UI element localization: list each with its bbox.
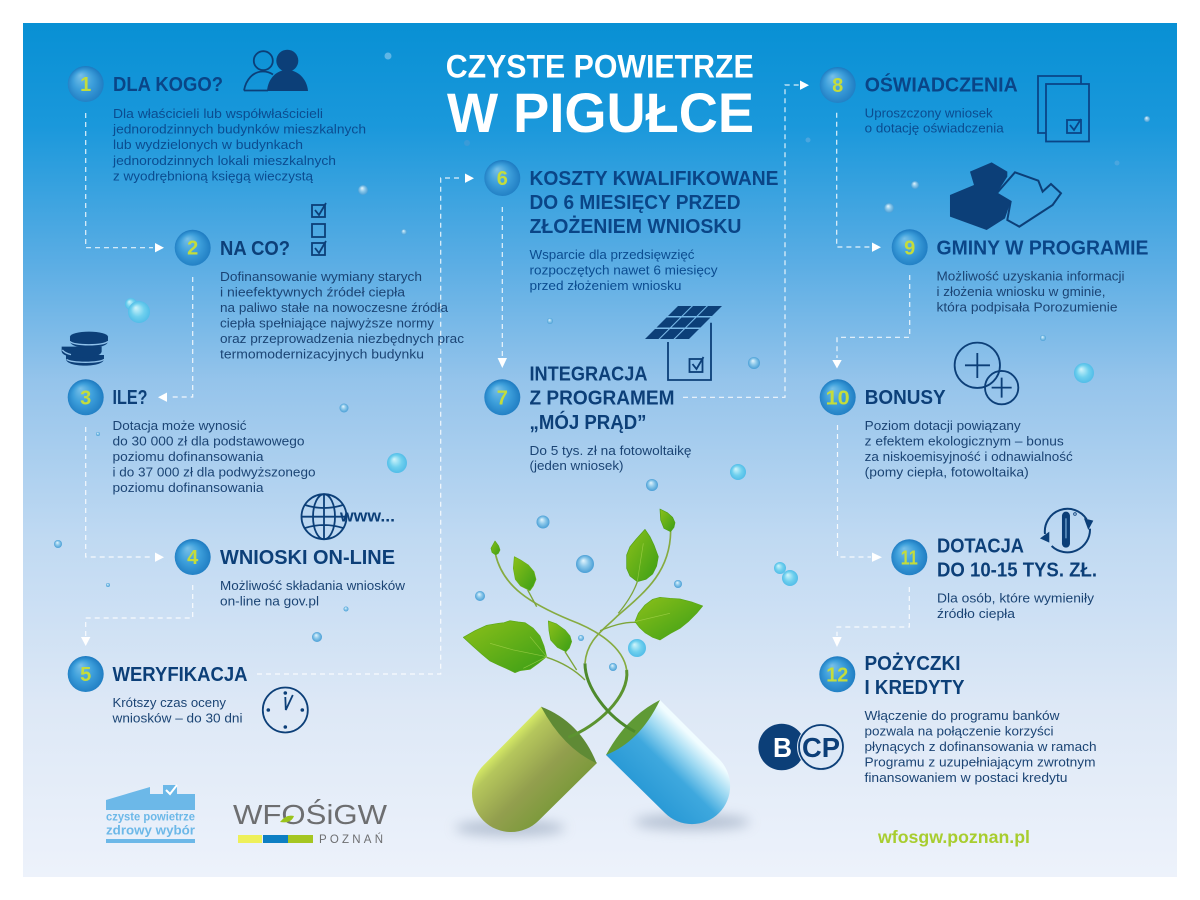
step 4: wnioski on-line: on-line na gov.pl xyxy=(220,594,319,608)
step 6: koszty kwalifikowane: DO 6 MIESIĘCY PRZED xyxy=(530,192,740,214)
step 3: ile: i do 37 000 zł dla podwyższonego xyxy=(112,466,316,480)
logo: WFOŚiGW Poznań: WFOŚiGW xyxy=(233,798,388,830)
step 9: gminy w programie xyxy=(892,229,1148,314)
icon: solar panel house xyxy=(645,306,722,380)
step 5: weryfikacja xyxy=(68,656,248,726)
step 9: gminy w programie: 9 xyxy=(904,237,915,259)
step 7: integracja: Do 5 tys. zł na fotowoltaikę xyxy=(530,444,692,458)
step 6: koszty kwalifikowane: Wsparcie dla przedsięwzięć xyxy=(530,248,694,262)
title: W PIGUŁCE xyxy=(447,81,754,144)
step 3: ile: do 30 000 zł dla podstawowego xyxy=(112,434,304,448)
step 8: oświadczenia xyxy=(820,67,1018,136)
step 5: weryfikacja: wniosków – do 30 dni xyxy=(111,712,242,726)
icon: clock xyxy=(263,688,308,732)
step 6: koszty kwalifikowane: 6 xyxy=(497,168,508,190)
step 12: pożyczki i kredyty xyxy=(819,652,1096,785)
step 4: wnioski on-line: Możliwość składania wniosków xyxy=(220,579,406,593)
step 5: weryfikacja: Krótszy czas oceny xyxy=(112,696,227,710)
illustration: capsule with plant xyxy=(455,509,750,836)
icon: coins xyxy=(62,332,108,366)
step 6: koszty kwalifikowane xyxy=(484,160,778,293)
step 10: bonusy: za niskoemisyjność i odnawialność xyxy=(865,450,1073,464)
step 1: dla kogo xyxy=(68,66,366,184)
step 6: koszty kwalifikowane: ZŁOŻENIEM WNIOSKU xyxy=(530,215,742,238)
icon: checklist xyxy=(312,203,326,255)
step 7: integracja: „MÓJ PRĄD” xyxy=(530,410,646,434)
step 6: koszty kwalifikowane: rozpoczętych nawet 6 miesięcy xyxy=(530,264,718,278)
step 10: bonusy: 10 xyxy=(826,387,850,409)
step 11: dotacja do 10-15 tys: 11 xyxy=(901,547,918,569)
icon: thermometer with arrows xyxy=(1040,509,1093,552)
logo: czyste powietrze zdrowy wybór: zdrowy wybór xyxy=(106,822,195,838)
step 3: ile: poziomu dofinansowania xyxy=(112,481,264,495)
step 9: gminy w programie: i złożenia wniosku w gminie, xyxy=(936,285,1106,299)
step 4: wnioski on-line xyxy=(175,539,406,608)
icon: documents xyxy=(1038,76,1089,142)
step 7: integracja: 7 xyxy=(497,387,508,409)
step 1: dla kogo: z wyodrębnioną księgą wieczystą xyxy=(113,170,313,184)
blue capsule xyxy=(606,700,730,824)
step 12: pożyczki i kredyty: POŻYCZKI xyxy=(864,652,960,675)
icon: globe www: www... xyxy=(339,507,395,526)
step 1: dla kogo: 1 xyxy=(80,74,91,96)
step 12: pożyczki i kredyty: płynących z dofinansowania w ramach xyxy=(864,740,1096,754)
icon: globe www xyxy=(302,494,395,539)
icon: BCP xyxy=(758,723,845,771)
step 12: pożyczki i kredyty: Programu z uzupełniającym zwrotnym xyxy=(864,756,1096,770)
step 10: bonusy: z efektem ekologicznym – bonus xyxy=(865,434,1064,448)
green capsule xyxy=(472,707,597,832)
step 1: dla kogo: DLA KOGO? xyxy=(113,74,223,96)
step 5: weryfikacja: WERYFIKACJA xyxy=(112,664,248,686)
connectors: dashed arrows between steps xyxy=(81,80,910,674)
step 1: dla kogo: jednorodzinnych budynków mieszkalnych xyxy=(112,123,366,137)
step 11: dotacja do 10-15 tys: DO 10-15 TYS. ZŁ. xyxy=(937,560,1097,582)
step 2: na co: na paliwo stałe na nowoczesne źródła xyxy=(220,301,448,315)
step 7: integracja xyxy=(484,364,692,473)
step 1: dla kogo: jednorodzinnych lokali mieszkalnych xyxy=(112,154,336,168)
icon: people xyxy=(244,50,308,91)
step 7: integracja: (jeden wniosek) xyxy=(530,459,624,473)
logo: WFOŚiGW Poznań xyxy=(233,798,388,846)
step 7: integracja: INTEGRACJA xyxy=(530,364,648,386)
step 1: dla kogo: Dla właścicieli lub współwłaścicieli xyxy=(113,107,323,121)
icon: BCP: B xyxy=(773,732,792,763)
step 10: bonusy: BONUSY xyxy=(865,387,946,409)
step 4: wnioski on-line: WNIOSKI ON-LINE xyxy=(220,547,395,569)
step 3: ile: poziomu dofinansowania xyxy=(112,450,264,464)
icon: BCP: CP xyxy=(802,732,840,763)
step 3: ile xyxy=(68,379,316,495)
step 6: koszty kwalifikowane: przed złożeniem wniosku xyxy=(530,279,682,293)
step 2: na co: i nieefektywnych źródeł ciepła xyxy=(220,286,405,300)
step 2: na co: oraz przeprowadzenia niezbędnych prac xyxy=(220,332,464,346)
step 2: na co xyxy=(175,230,464,362)
step 12: pożyczki i kredyty: I KREDYTY xyxy=(864,677,965,699)
step 8: oświadczenia: Uproszczony wniosek xyxy=(865,107,993,121)
step 12: pożyczki i kredyty: finansowaniem w postaci kredytu xyxy=(864,771,1068,785)
step 4: wnioski on-line: 4 xyxy=(187,547,199,569)
logo: czyste powietrze zdrowy wybór xyxy=(106,785,195,843)
step 6: koszty kwalifikowane: KOSZTY KWALIFIKOWANE xyxy=(530,168,778,190)
step 3: ile: Dotacja może wynosić xyxy=(112,419,246,433)
step 2: na co: 2 xyxy=(187,238,198,260)
step 9: gminy w programie: GMINY W PROGRAMIE xyxy=(936,238,1148,260)
logo: czyste powietrze zdrowy wybór: czyste powietrze xyxy=(106,812,195,824)
website url: wfosgw.poznan.pl xyxy=(877,827,1030,847)
title: CZYSTE POWIETRZE xyxy=(446,49,754,85)
step 1: dla kogo: lub wydzielonych w budynkach xyxy=(113,138,303,152)
logo: WFOŚiGW Poznań: POZNAŃ xyxy=(319,833,383,846)
step 11: dotacja do 10-15 tys: DOTACJA xyxy=(937,535,1024,557)
step 9: gminy w programie: Możliwość uzyskania informacji xyxy=(936,270,1124,284)
step 11: dotacja do 10-15 tys xyxy=(891,535,1097,621)
step 12: pożyczki i kredyty: 12 xyxy=(826,664,848,686)
step 10: bonusy: Poziom dotacji powiązany xyxy=(865,419,1021,433)
step 2: na co: NA CO? xyxy=(220,238,290,260)
step 3: ile: 3 xyxy=(80,387,91,409)
step 8: oświadczenia: o dotację oświadczenia xyxy=(865,122,1004,136)
step 2: na co: Dofinansowanie wymiany starych xyxy=(220,270,422,284)
title xyxy=(446,49,754,144)
step 3: ile: ILE? xyxy=(112,387,148,409)
step 2: na co: termomodernizacyjnych budynku xyxy=(220,348,424,362)
icon: two plus circles xyxy=(955,343,1018,404)
bubbles xyxy=(54,52,1150,671)
step 12: pożyczki i kredyty: pozwala na połączenie korzyści xyxy=(864,724,1054,738)
step 8: oświadczenia: OŚWIADCZENIA xyxy=(865,73,1018,97)
step 11: dotacja do 10-15 tys: źródło ciepła xyxy=(937,607,1015,621)
icon: map of municipalities xyxy=(950,162,1061,230)
plant stems, leaves and capsule openings xyxy=(463,509,703,763)
step 2: na co: ciepła spełniające najwyższe normy xyxy=(220,316,435,330)
step 8: oświadczenia: 8 xyxy=(832,75,843,97)
step 7: integracja: Z PROGRAMEM xyxy=(530,388,674,410)
step 5: weryfikacja: 5 xyxy=(80,664,91,686)
step 12: pożyczki i kredyty: Włączenie do programu banków xyxy=(864,709,1060,723)
step 10: bonusy: (pomy ciepła, fotowoltaika) xyxy=(865,466,1029,480)
step 9: gminy w programie: która podpisała Porozumienie xyxy=(936,300,1118,314)
step 11: dotacja do 10-15 tys: Dla osób, które wymieniły xyxy=(937,592,1095,606)
step 10: bonusy xyxy=(820,379,1073,480)
